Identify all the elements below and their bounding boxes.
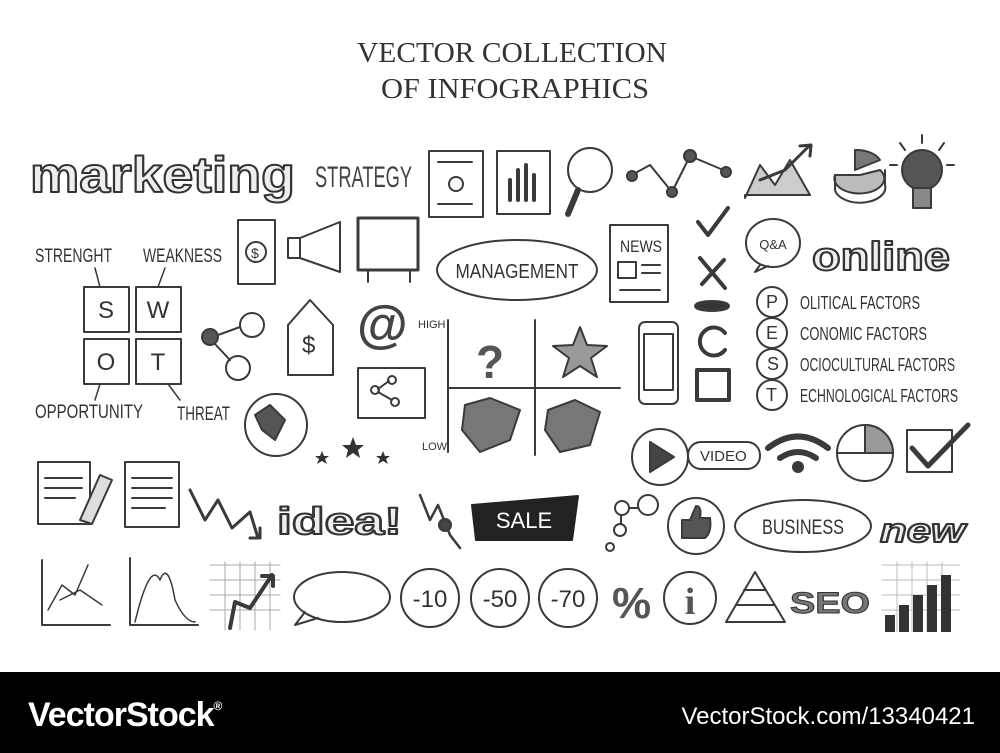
SWOT labels: OPPORTUNITY xyxy=(35,402,143,423)
icon: news: NEWS xyxy=(620,237,662,256)
Q&A bubble xyxy=(746,219,800,272)
speech bubble xyxy=(294,572,390,625)
icon: down arrow xyxy=(190,490,260,538)
icon: wifi xyxy=(768,436,828,470)
icon: at sign: @ xyxy=(357,296,408,354)
icon: pie xyxy=(837,425,893,481)
icon: bubbles xyxy=(606,495,658,551)
SWOT labels: STRENGHT xyxy=(35,246,112,267)
oval: business xyxy=(735,500,871,552)
word: online: online xyxy=(812,235,950,279)
video button xyxy=(632,429,760,485)
icon: stars xyxy=(315,437,390,464)
icon: growth arrow xyxy=(745,145,811,198)
SWOT labels xyxy=(35,246,230,425)
footer bar: VectorStock xyxy=(28,696,214,734)
PEST list xyxy=(757,287,958,410)
chart: curves xyxy=(130,558,198,625)
word: new: new xyxy=(880,512,968,550)
SWOT grid xyxy=(84,268,181,400)
icon: megaphone xyxy=(288,222,340,272)
chart: bars xyxy=(882,562,960,632)
footer bar: VectorStock.com/13340421 xyxy=(681,703,975,730)
icon: info xyxy=(664,572,716,624)
PEST list: P xyxy=(766,292,778,312)
matrix: HIGH xyxy=(418,319,446,331)
icon: money xyxy=(238,220,275,284)
title xyxy=(357,37,667,105)
footer bar xyxy=(0,672,1000,753)
word: idea: idea! xyxy=(277,501,402,543)
icon: 3D pie xyxy=(834,150,885,203)
icon: globe xyxy=(245,394,307,456)
icon: checkbox xyxy=(907,425,968,472)
discount circles xyxy=(401,569,597,627)
icon: lightbulb xyxy=(890,135,954,208)
sale brush: SALE xyxy=(496,508,552,533)
title: OF INFOGRAPHICS xyxy=(381,73,649,105)
SWOT labels: WEAKNESS xyxy=(143,246,222,267)
icon: monitor xyxy=(358,218,418,282)
SWOT grid: S xyxy=(98,297,114,324)
icon: line chart xyxy=(627,150,731,197)
word: seo: SEO xyxy=(790,587,870,620)
chart: arrows xyxy=(42,560,110,625)
word: marketing: marketing xyxy=(30,147,295,203)
icon: pyramid xyxy=(726,572,785,622)
icon: presentation xyxy=(358,368,425,418)
SWOT grid: W xyxy=(147,297,170,324)
icon: pin chart xyxy=(420,495,460,548)
oval: management xyxy=(437,240,597,300)
icon: price tag xyxy=(288,300,333,375)
icon: money: $ xyxy=(251,245,259,261)
discount circles: -70 xyxy=(551,586,585,613)
word: strategy: STRATEGY xyxy=(315,161,412,194)
PEST list: E xyxy=(766,323,778,343)
icon: news xyxy=(610,225,668,302)
icon: doc xyxy=(125,462,179,527)
discount circles: -10 xyxy=(413,586,447,613)
SWOT grid: O xyxy=(97,349,115,376)
matrix xyxy=(418,319,620,455)
icon: bar chart box xyxy=(497,151,550,214)
matrix: ? xyxy=(476,336,504,388)
icon: magnifier xyxy=(568,148,612,214)
sale brush xyxy=(472,496,578,540)
PEST list: S xyxy=(767,354,779,374)
icon: phone xyxy=(639,322,678,404)
icon: doc with pencil xyxy=(38,462,112,524)
icon: info: i xyxy=(685,581,695,623)
icon: document xyxy=(429,151,483,217)
oval: business: BUSINESS xyxy=(762,516,844,539)
icon: percent: % xyxy=(612,579,651,628)
chart: grid arrow xyxy=(210,562,280,630)
PEST list: T xyxy=(766,385,777,405)
icon: thumbs up xyxy=(668,498,724,554)
discount circles: -50 xyxy=(483,586,517,613)
PEST list: CONOMIC FACTORS xyxy=(800,324,927,344)
PEST list: OLITICAL FACTORS xyxy=(800,293,920,313)
SWOT grid: T xyxy=(151,349,166,376)
marks column xyxy=(696,208,729,400)
icon: molecule xyxy=(202,313,264,380)
SWOT labels: THREAT xyxy=(177,404,230,425)
icon: price tag: $ xyxy=(302,332,315,359)
Q&A bubble: Q&A xyxy=(759,237,787,252)
title: VECTOR COLLECTION xyxy=(357,37,667,69)
oval: management: MANAGEMENT xyxy=(456,261,578,283)
matrix: LOW xyxy=(422,441,448,453)
footer bar: ® xyxy=(214,699,223,713)
video button: VIDEO xyxy=(700,448,747,465)
